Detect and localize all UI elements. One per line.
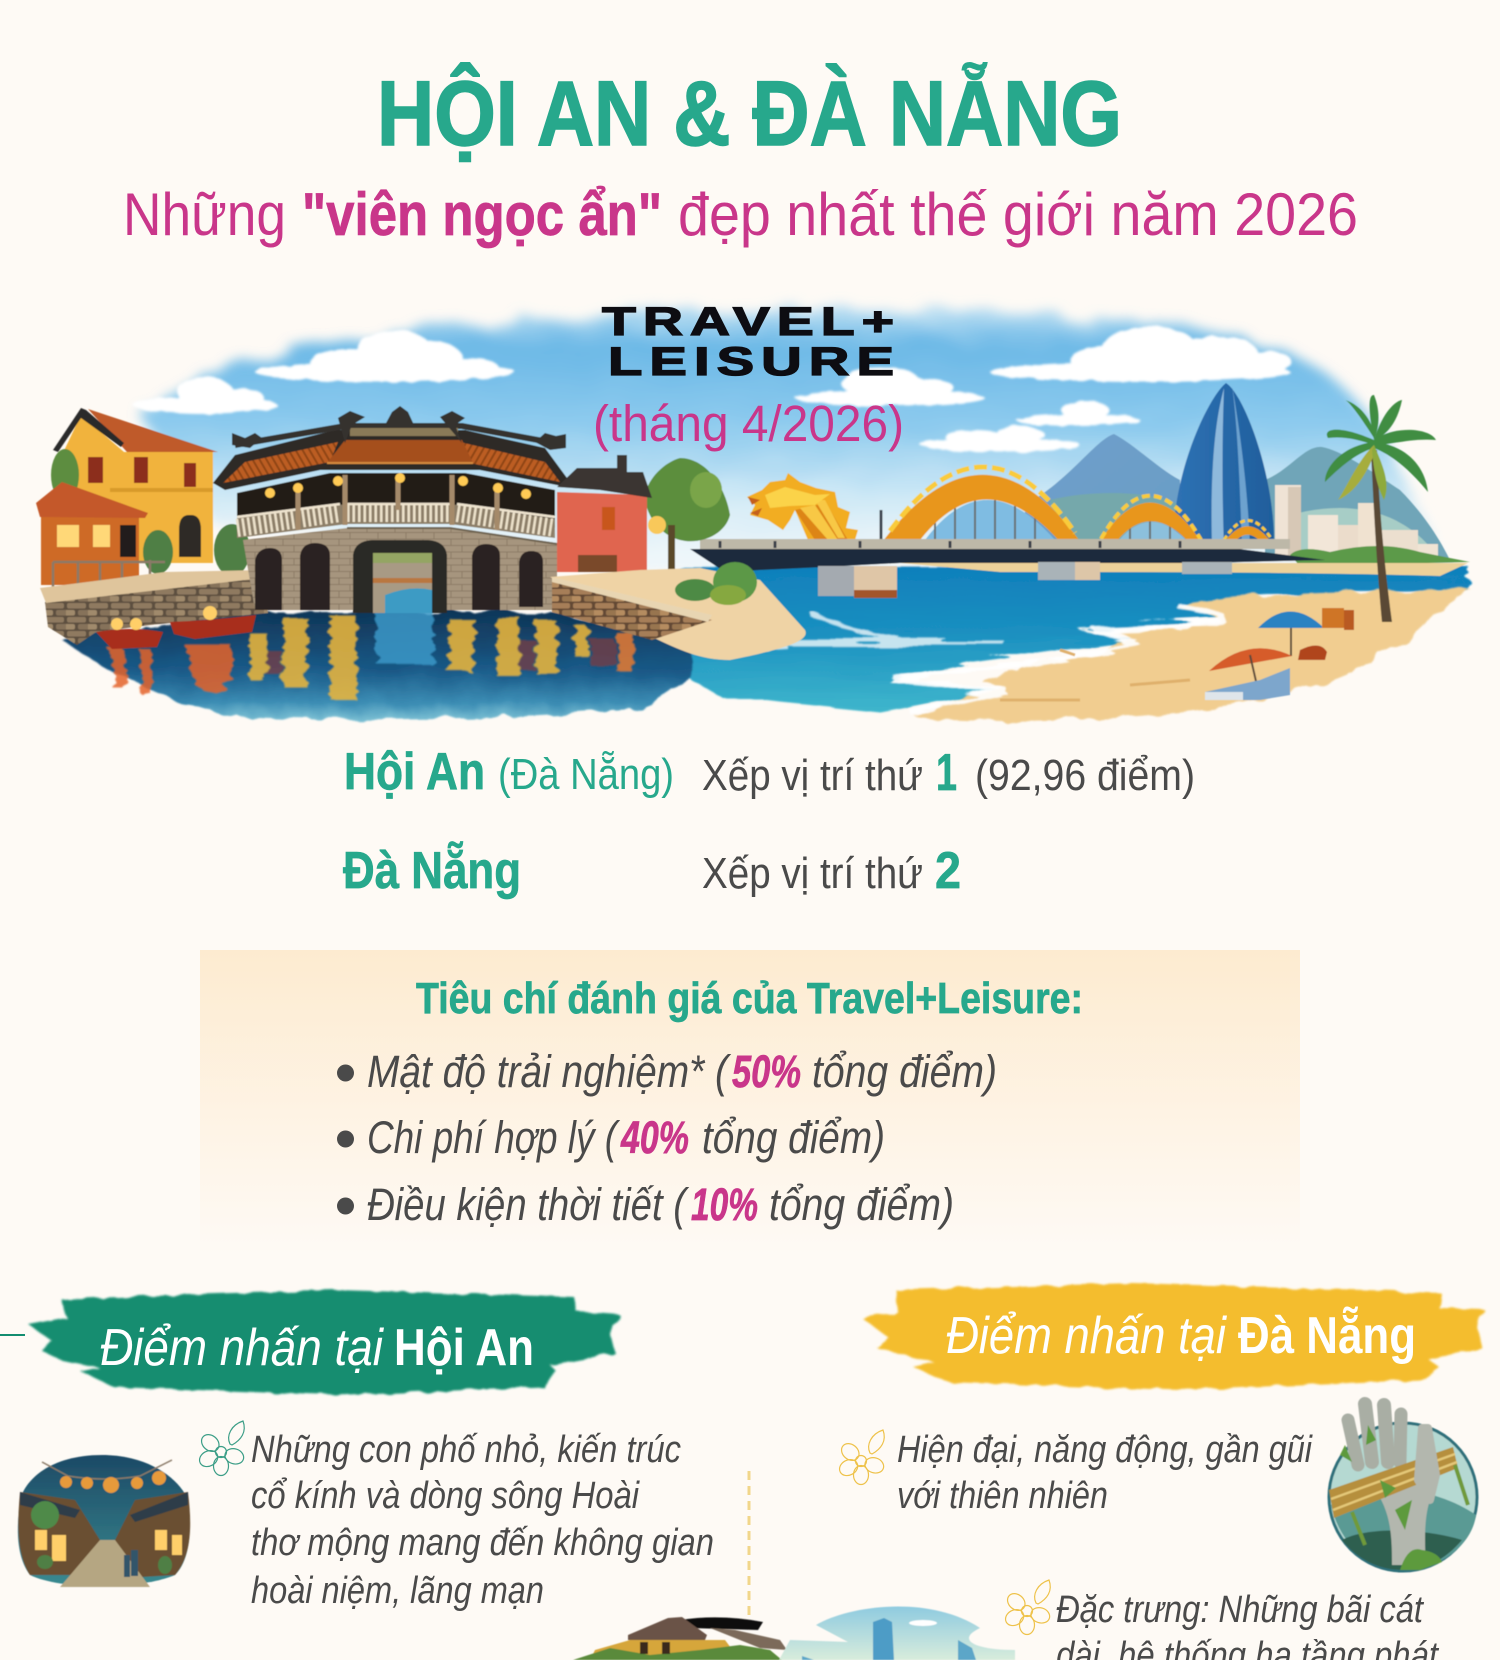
ranking: Đà Nẵng: Đà Nẵng (343, 841, 521, 900)
icon: yellow flower (1003, 1580, 1052, 1634)
logo: Travel + Leisure (602, 300, 901, 384)
subtitle: "viên ngọc ẩn" (302, 181, 662, 248)
column divider (748, 1471, 750, 1618)
ranking: Hội An: Hội An (344, 743, 485, 801)
beach (720, 563, 1472, 720)
text block: Đà Nẵng features (1056, 1589, 1439, 1660)
criterion: experience density: 50% (732, 1046, 801, 1097)
criterion: weather (337, 1179, 954, 1230)
text block: Đà Nẵng character: Hiện đại, năng động, gần gũi (897, 1429, 1313, 1471)
left stone embankment and boats (40, 570, 268, 649)
logo: Travel + Leisure: LEISURE (608, 340, 901, 384)
sea (660, 566, 1468, 712)
text block: Hội An highlights: thơ mộng mang đến không gian (251, 1522, 714, 1564)
criterion: experience density (337, 1046, 997, 1097)
Hội An water with lantern reflections (62, 605, 693, 719)
illustration: Hội An and Đà Nẵng panorama (36, 309, 1472, 720)
Japanese covered bridge (213, 406, 572, 613)
text block: Đà Nẵng character: với thiên nhiên (897, 1475, 1108, 1517)
red building and tree (557, 455, 730, 572)
criterion: reasonable cost: tổng điểm) (702, 1112, 885, 1163)
banner: Điểm nhấn tại Đà Nẵng: Điểm nhấn tại (946, 1307, 1227, 1365)
subtitle: đẹp nhất thế giới năm 2026 (678, 181, 1358, 248)
ranking: Hội An: 1 (936, 744, 957, 802)
beach umbrellas (1205, 608, 1354, 700)
icon: night street of Hội An (18, 1455, 190, 1587)
icon: teal flower (197, 1421, 246, 1476)
criterion: reasonable cost: Chi phí hợp lý ( (367, 1112, 620, 1163)
panel: evaluation criteria (200, 950, 1300, 1254)
text block: Đà Nẵng character (897, 1429, 1313, 1517)
text block: Hội An highlights: cổ kính và dòng sông Hoài (251, 1475, 640, 1517)
dragon head (747, 473, 858, 540)
ranking: Đà Nẵng (343, 841, 961, 900)
mountains and buildings (1025, 434, 1470, 566)
ranking: Hội An: (Đà Nẵng) (498, 750, 674, 799)
banner: Điểm nhấn tại Hội An: Hội An (394, 1319, 534, 1377)
right bank, wall and shrubs (550, 562, 806, 660)
sky with clouds (133, 309, 1450, 570)
criterion: reasonable cost: 40% (620, 1112, 689, 1163)
logo: Travel + Leisure: TRAVEL+ (602, 300, 901, 344)
subtitle (123, 181, 1358, 248)
criteria heading: Tiêu chí đánh giá của Travel+Leisure: (416, 974, 1083, 1023)
banner: Điểm nhấn tại Hội An (0, 1290, 620, 1395)
ranking: Hội An: (92,96 điểm) (975, 751, 1195, 800)
yellow house (51, 408, 218, 563)
palm tree (1325, 395, 1436, 622)
criterion: weather: tổng điểm) (769, 1179, 954, 1230)
text block: Đà Nẵng features: Đặc trưng: Những bãi cát (1056, 1589, 1424, 1631)
icon: Golden Bridge hand (1329, 1404, 1477, 1571)
criterion: experience density: tổng điểm) (812, 1046, 997, 1097)
Dragon Bridge (690, 467, 1325, 598)
banner: Điểm nhấn tại Đà Nẵng: Đà Nẵng (1238, 1306, 1416, 1365)
ranking: Đà Nẵng: 2 (935, 842, 961, 900)
ranking: Hội An: Xếp vị trí thứ (702, 751, 923, 800)
text block: Hội An highlights (251, 1429, 714, 1612)
criterion: reasonable cost (337, 1112, 885, 1163)
icon: yellow flower (837, 1430, 886, 1484)
title: HỘI AN & ĐÀ NẴNG (377, 62, 1122, 165)
banner: Điểm nhấn tại Hội An: Điểm nhấn tại (100, 1319, 384, 1377)
ranking: Đà Nẵng: Xếp vị trí thứ (702, 849, 923, 898)
criterion: experience density: Mật độ trải nghiệm* ( (367, 1046, 731, 1097)
low orange house (36, 482, 250, 587)
icon: old town house photo (573, 1617, 787, 1660)
criterion: weather: Điều kiện thời tiết ( (367, 1179, 689, 1230)
criterion: weather: 10% (691, 1179, 758, 1230)
banner: Điểm nhấn tại Đà Nẵng (862, 1283, 1484, 1390)
date label: (tháng 4/2026) (593, 395, 904, 452)
ranking: Hội An (344, 743, 1195, 802)
Đà Nẵng tower (1173, 383, 1274, 548)
text block: Hội An highlights: hoài niệm, lãng mạn (251, 1570, 544, 1612)
text block: Hội An highlights: Những con phố nhỏ, kiến trúc (251, 1429, 681, 1471)
subtitle: Những (123, 181, 286, 248)
icon: Đà Nẵng skyline circle (779, 1607, 1015, 1660)
